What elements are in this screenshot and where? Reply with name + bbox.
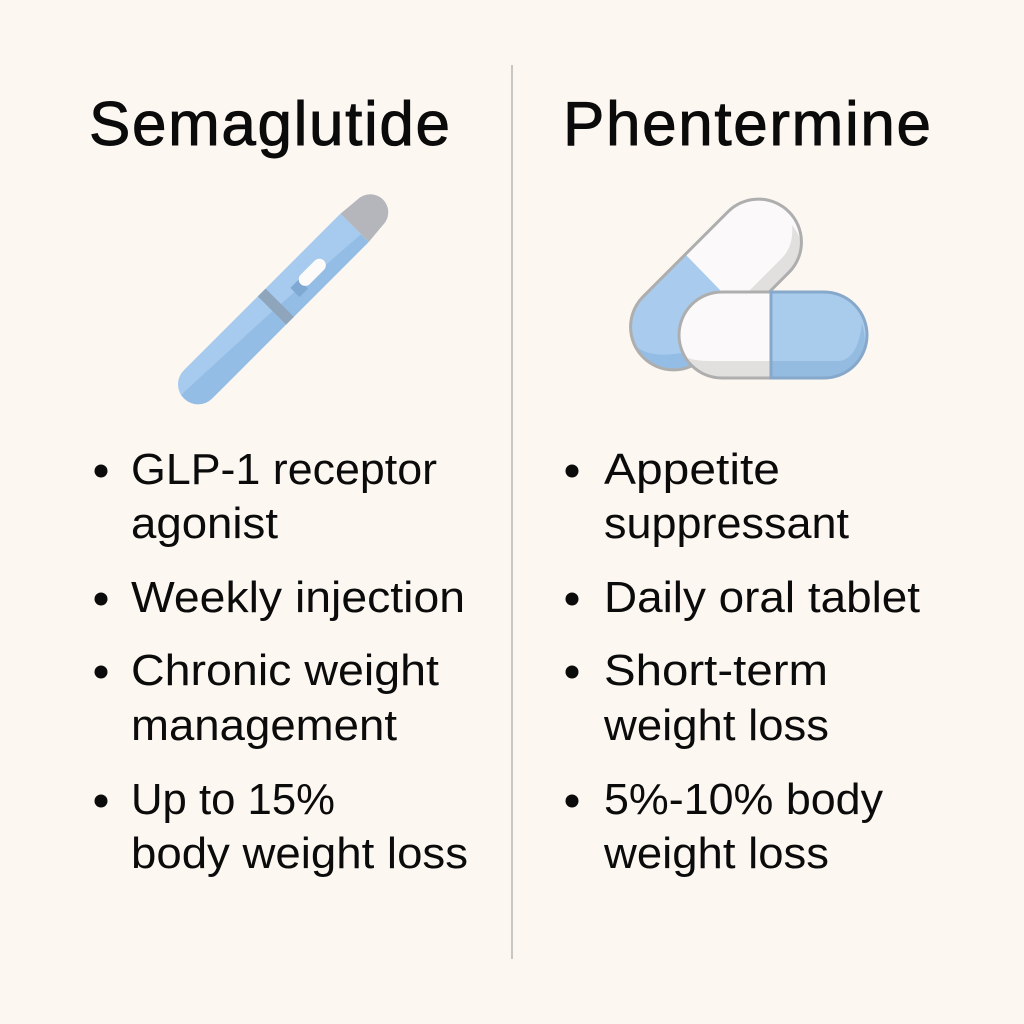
bullet: 5%-10% body weight loss: weight loss (603, 829, 829, 878)
bullet: Daily oral tablet: Daily oral tablet (604, 573, 920, 622)
bullet: Appetite suppressant: Appetite (604, 445, 780, 494)
icon: injection pen (170, 185, 397, 413)
bullet: Up to 15% body weight loss (94, 775, 468, 878)
bullet: Chronic weight management: management (131, 701, 397, 750)
panel: Phentermine (563, 90, 931, 878)
bullet: GLP-1 receptor agonist: GLP-1 receptor (131, 445, 437, 494)
bullet: GLP-1 receptor agonist: agonist (131, 499, 278, 548)
bullet list: Semaglutide facts (94, 445, 468, 878)
infographic canvas (91, 65, 929, 959)
bullet: Appetite suppressant (566, 445, 849, 548)
bullet: Up to 15% body weight loss: Up to 15% (131, 775, 335, 824)
bullet: 5%-10% body weight loss: 5%-10% body (604, 775, 883, 824)
bullet: GLP-1 receptor agonist (94, 445, 437, 548)
icon: tilted capsule (629, 198, 803, 372)
heading: Phentermine: Phentermine (563, 90, 931, 159)
panel: Semaglutide (89, 90, 468, 878)
bullet: Chronic weight management: Chronic weight (131, 646, 439, 695)
icon: capsules (629, 198, 868, 380)
icon: horizontal capsule (679, 292, 867, 378)
bullet: Short-term weight loss: Short-term (604, 646, 828, 695)
bullet list: Phentermine facts (566, 445, 920, 878)
bullet: Short-term weight loss: weight loss (603, 701, 829, 750)
bullet: 5%-10% body weight loss (566, 775, 883, 878)
bullet: Short-term weight loss (566, 646, 829, 750)
bullet: Chronic weight management (94, 646, 439, 750)
bullet: Up to 15% body weight loss: body weight loss (131, 829, 468, 878)
heading: Semaglutide: Semaglutide (89, 90, 450, 159)
bullet: Weekly injection: Weekly injection (131, 573, 465, 622)
bullet: Appetite suppressant: suppressant (604, 499, 849, 548)
